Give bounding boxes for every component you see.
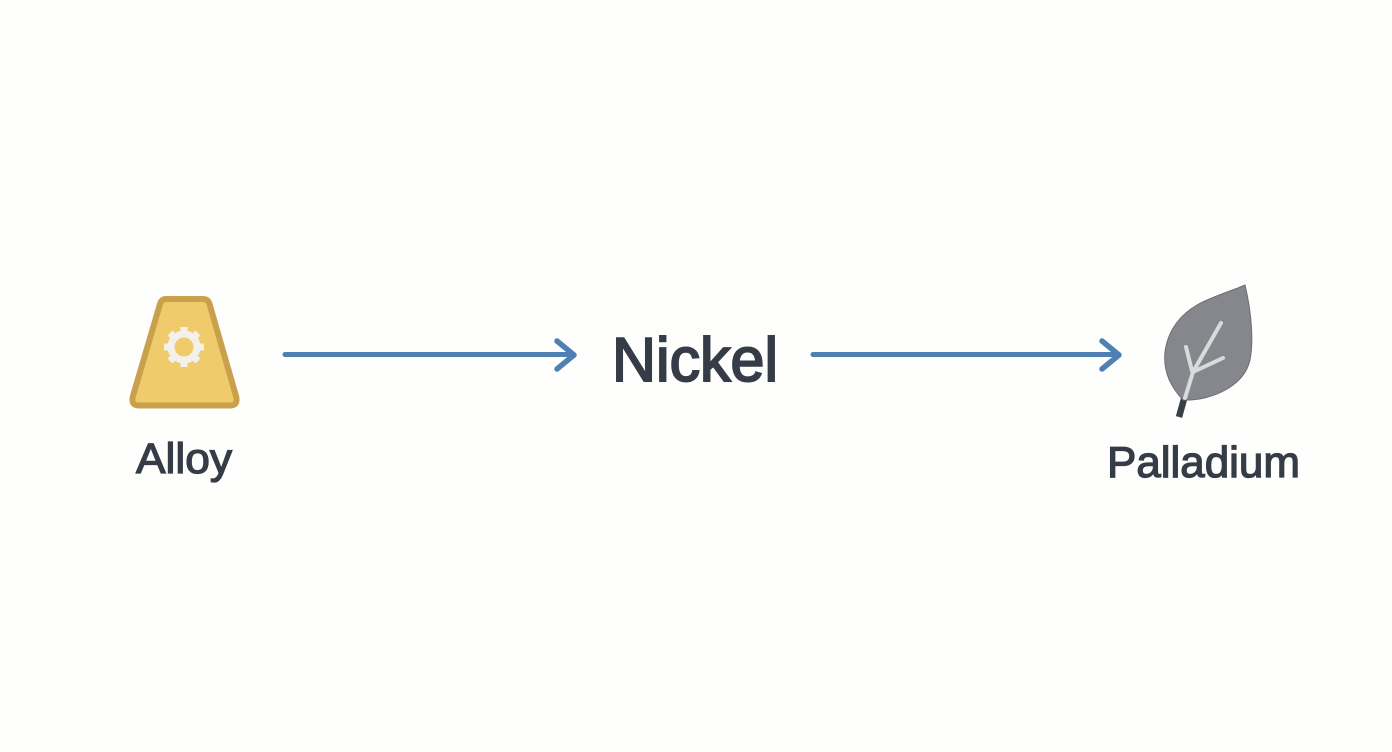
label: Palladium: Palladium bbox=[1107, 438, 1300, 487]
label: Alloy: Alloy bbox=[136, 435, 233, 483]
leaf stem bbox=[1179, 399, 1184, 417]
arrow: alloy to nickel bbox=[285, 341, 574, 369]
leaf veins bbox=[1185, 323, 1223, 398]
icon: gear bbox=[164, 327, 204, 367]
icon: alloy ingot with gear bbox=[132, 299, 237, 406]
icon: palladium leaf bbox=[1165, 285, 1252, 417]
leaf blade bbox=[1165, 285, 1252, 400]
arrow: nickel to palladium bbox=[813, 341, 1119, 369]
label: Nickel: Nickel bbox=[612, 326, 778, 395]
